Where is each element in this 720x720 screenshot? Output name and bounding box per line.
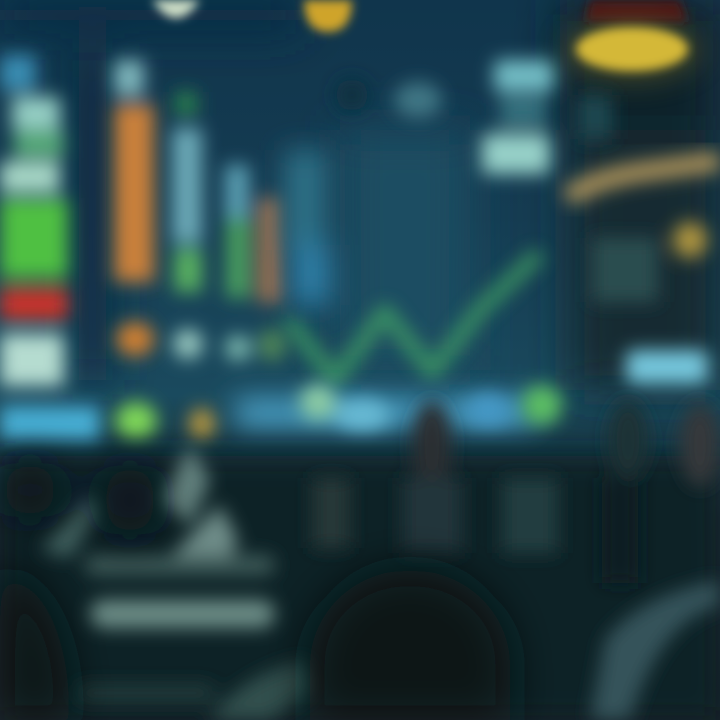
chart: green line [292,258,535,380]
panel: dark screen columns [0,0,720,390]
audience: dark silhouettes [0,400,720,720]
audience: foreground head silhouettes [0,462,510,720]
audience: standing figures [312,400,720,583]
icon: ceiling lamp [564,0,700,80]
chart: orange bar [114,60,157,440]
panel: right screen tiles [336,60,708,384]
audience: pale shoulders [40,445,720,720]
icon: top lights [152,0,352,32]
glow: lower band accents [300,384,562,431]
arrow: golden curve [568,161,720,198]
panel: left bar stack [0,55,100,442]
glow: blue highlights [235,150,535,428]
chart: smaller bars [172,92,286,440]
